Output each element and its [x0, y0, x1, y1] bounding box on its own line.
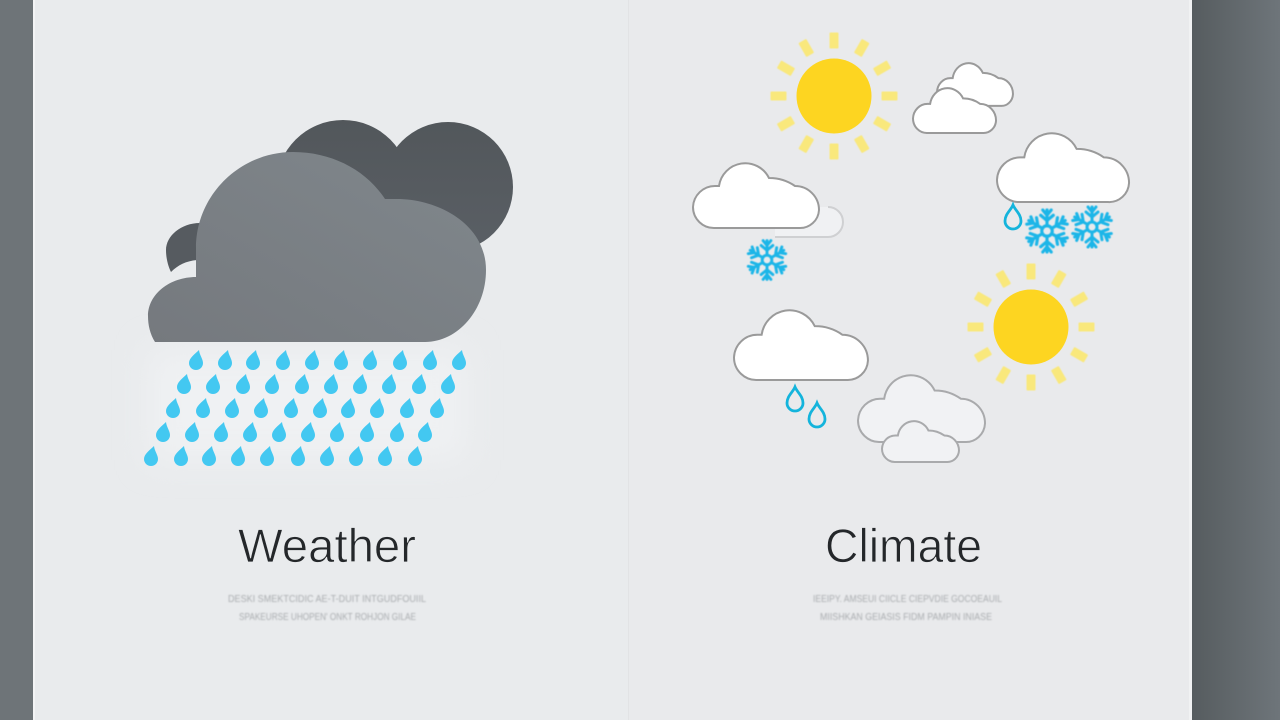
- heading: Weather: Weather: [238, 519, 416, 572]
- background right band: [1192, 0, 1280, 720]
- outline drop: [1005, 205, 1021, 229]
- background left band: [0, 0, 33, 720]
- panel: weather: [33, 0, 628, 720]
- icon: faded clouds: [858, 375, 985, 462]
- caption: weather: DESKI SMEKTCIDIC AE-T-DUIT INTGUDFOUIIL: [228, 594, 426, 605]
- caption: climate: [813, 594, 1002, 623]
- icon: storm cloud: [148, 120, 513, 342]
- small back crescent: [166, 223, 200, 272]
- caption: climate: IEEIPY. AMSEUI CIICLE CIEPVDIE GOCOEAUIL: [813, 594, 1002, 605]
- icon: snow cloud right: [997, 133, 1129, 252]
- caption: weather: [228, 594, 426, 623]
- heading: Climate: Climate: [825, 519, 982, 572]
- back dark cloud: [276, 120, 513, 254]
- caption: climate: MIISHKAN GEIASIS FIDM PAMPIN INIASE: [820, 612, 992, 623]
- front grey cloud: [148, 152, 486, 342]
- icon: lower sun: [968, 264, 1094, 390]
- caption: weather: SPAKEURSE UHOPEN' ONKT ROHJON GILAE: [239, 612, 416, 623]
- panel: climate: [628, 0, 1192, 720]
- icon: snow cloud left: [693, 163, 843, 279]
- snowflake: [1026, 210, 1068, 252]
- snowflake: [747, 241, 787, 279]
- icon: rain drops: [144, 350, 466, 466]
- icon: pair of clouds top: [913, 63, 1013, 133]
- icon: upper sun: [770, 32, 898, 160]
- outline drops: [787, 387, 825, 427]
- icon: rain cloud: [734, 310, 868, 427]
